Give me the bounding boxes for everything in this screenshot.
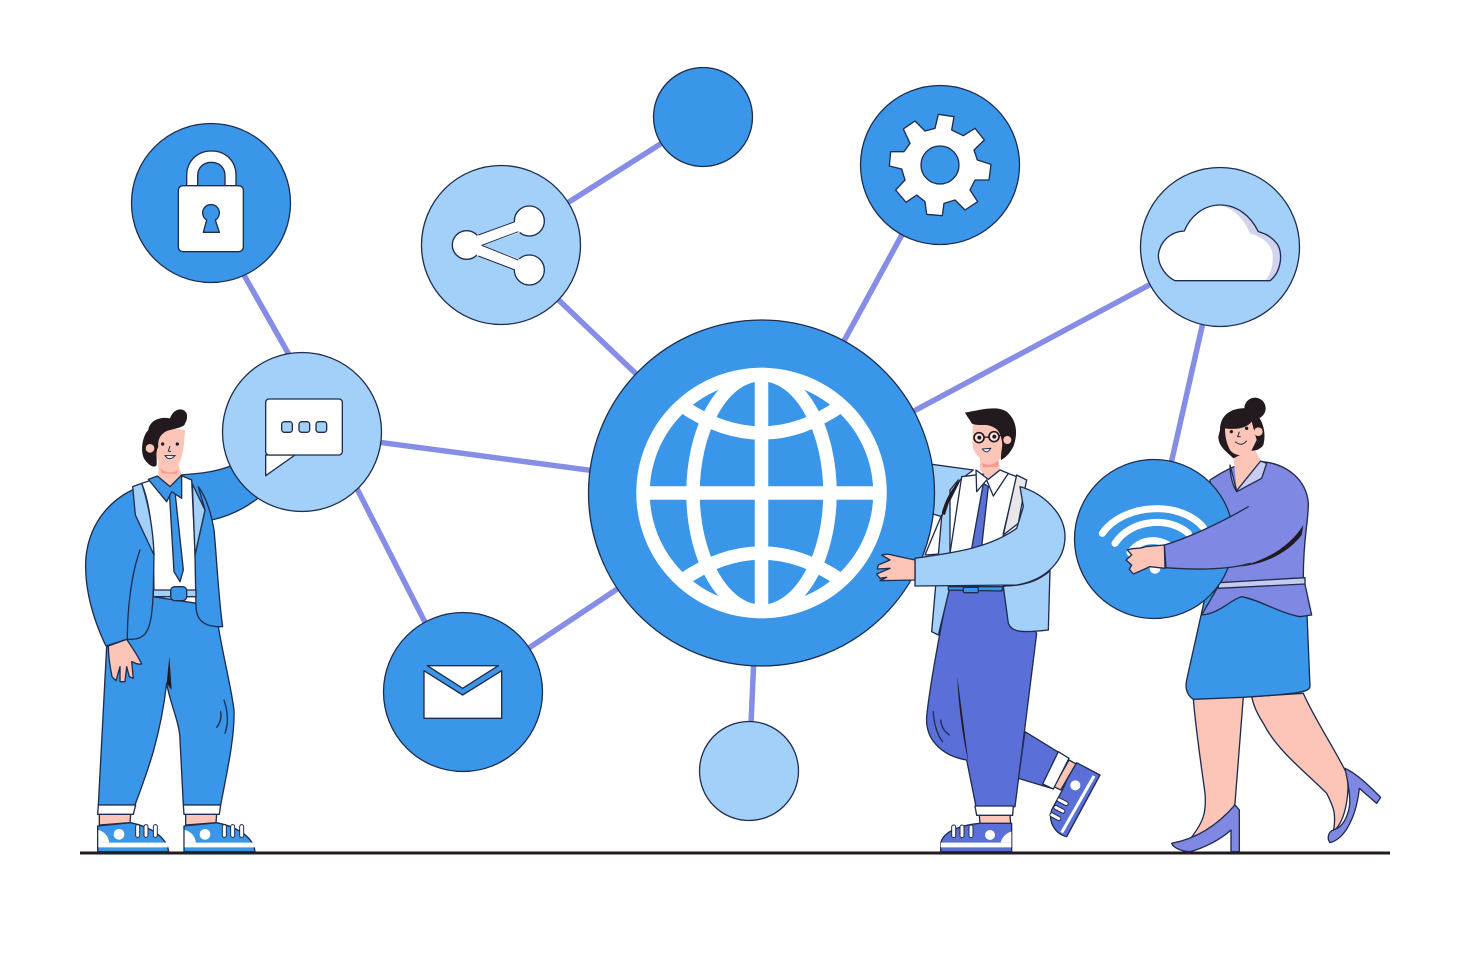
head bbox=[965, 408, 1016, 496]
neck and face bbox=[142, 409, 187, 486]
node: mail bbox=[384, 612, 542, 772]
man 1: standing on the left bbox=[86, 409, 255, 852]
shoes bbox=[98, 823, 255, 852]
woman arm and hand over the wifi node bbox=[1126, 500, 1303, 574]
icon: gear bbox=[889, 114, 991, 216]
belt bbox=[153, 587, 196, 601]
tie bbox=[972, 483, 988, 548]
node: share bbox=[422, 166, 580, 324]
hand bbox=[108, 639, 142, 682]
node: chat bbox=[222, 352, 382, 512]
back leg and shoe bbox=[1018, 732, 1100, 837]
hand bbox=[877, 554, 915, 581]
man 2 back arm bbox=[920, 463, 973, 517]
arm bbox=[915, 487, 1065, 586]
trousers bbox=[927, 590, 1037, 807]
sleeve shadow bbox=[1240, 525, 1303, 567]
front shoe bbox=[941, 806, 1013, 852]
trousers bbox=[98, 597, 234, 805]
icon: wifi bbox=[1102, 509, 1203, 574]
woman body behind wifi node bbox=[1172, 398, 1381, 852]
jacket bbox=[86, 487, 154, 646]
node: bottom dot bbox=[700, 722, 798, 820]
jacket bbox=[932, 475, 1050, 635]
tie and collar bbox=[148, 475, 183, 582]
man 1 raised arm bbox=[180, 465, 260, 520]
node: wifi bbox=[1074, 460, 1234, 618]
node: lock bbox=[132, 124, 290, 282]
icon: cloud bbox=[1158, 205, 1281, 281]
icon: share bbox=[452, 206, 544, 285]
icon: speech bubble bbox=[266, 399, 342, 476]
icon: globe bbox=[643, 374, 880, 612]
node: gear bbox=[860, 86, 1020, 244]
icon: envelope bbox=[424, 666, 502, 718]
connector lines between nodes bbox=[240, 117, 1220, 771]
shirt bbox=[925, 472, 1017, 590]
icon: padlock bbox=[178, 151, 243, 252]
man 2: glasses, holding the globe bbox=[877, 408, 1100, 852]
node: top dot bbox=[654, 68, 752, 166]
node: cloud bbox=[1140, 168, 1300, 326]
sleeve bbox=[1164, 500, 1303, 569]
hand bbox=[1126, 545, 1165, 574]
belt bbox=[948, 587, 1003, 593]
ground line bbox=[80, 852, 1390, 854]
node: central globe bbox=[588, 320, 934, 666]
shirt bbox=[142, 475, 196, 593]
